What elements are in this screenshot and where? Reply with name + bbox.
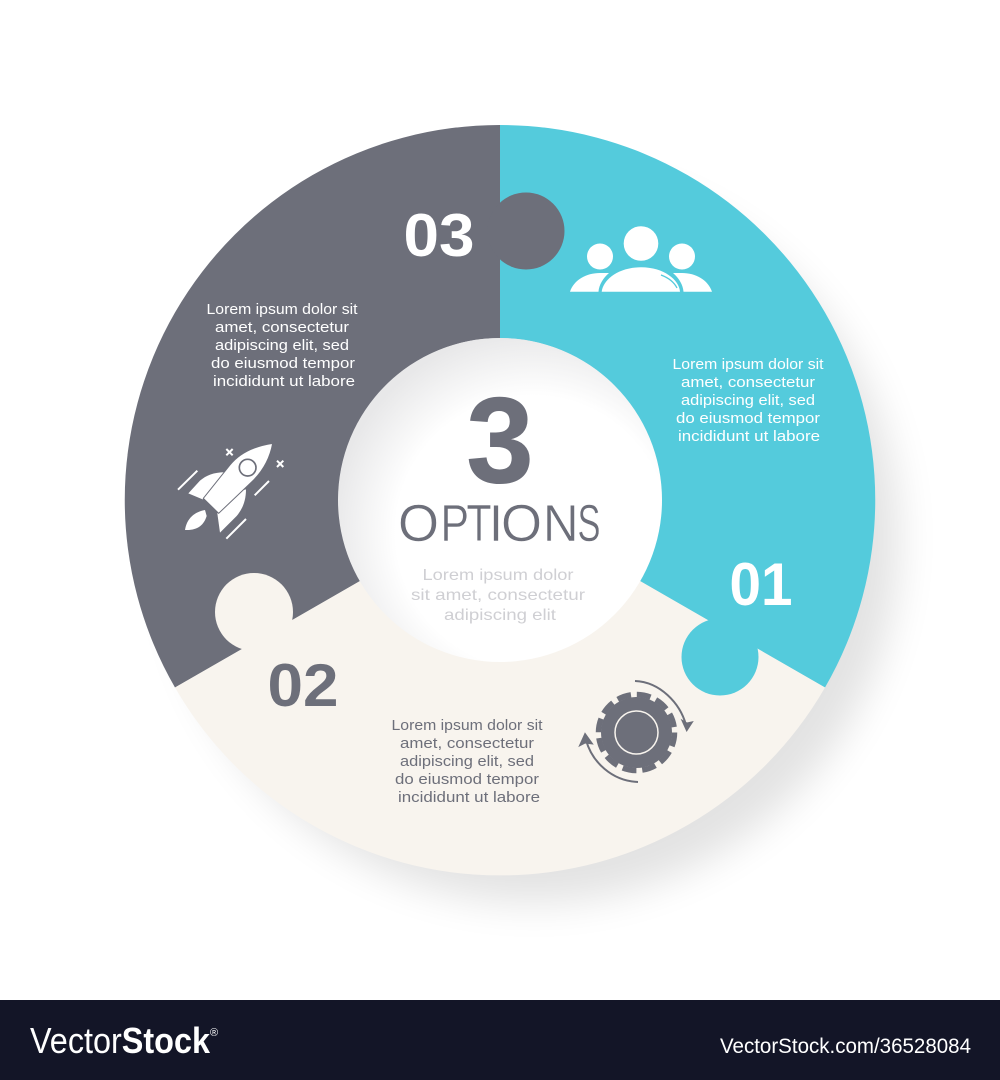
center heading OPTIONS: O [398, 495, 439, 553]
text block 02 [392, 717, 543, 806]
text block 03: incididunt ut labore [213, 373, 355, 390]
text block 01: Lorem ipsum dolor sit [672, 356, 824, 373]
center caption [411, 567, 586, 624]
footer trademark: ® [210, 1027, 218, 1039]
icon: rocket [178, 443, 283, 539]
center heading OPTIONS: I [489, 495, 503, 553]
center caption: Lorem ipsum dolor [422, 567, 574, 584]
footer bar [0, 1000, 1000, 1080]
icon: gear with arrows [579, 681, 693, 782]
text block 01: amet, consectetur [681, 374, 815, 391]
segment 03: gray [125, 125, 500, 688]
center number 3: 3 [466, 372, 534, 508]
text block 02: Lorem ipsum dolor sit [392, 717, 543, 734]
center heading OPTIONS: T [466, 495, 492, 553]
icon: people [570, 226, 712, 292]
text block 02: adipiscing elit, sed [400, 753, 534, 770]
footer url: VectorStock.com/36528084 [720, 1035, 971, 1058]
center circle [338, 338, 662, 662]
drop shadow of ring [169, 173, 899, 903]
segment 01: cyan [500, 125, 875, 687]
text block 03: Lorem ipsum dolor sit [206, 301, 358, 318]
footer logo: VectorStock [30, 1020, 211, 1061]
number 03: 03 [404, 202, 474, 269]
number 01: 01 [730, 551, 792, 618]
text block 03: do eiusmod tempor [211, 355, 355, 372]
center heading OPTIONS: P [440, 495, 469, 553]
text block 03: amet, consectetur [215, 319, 349, 336]
center caption: sit amet, consectetur [411, 587, 586, 604]
text block 01 [672, 356, 824, 445]
text block 03 [206, 301, 358, 390]
center caption: adipiscing elit [444, 607, 557, 624]
text block 02: incididunt ut labore [398, 789, 540, 806]
text block 01: adipiscing elit, sed [681, 392, 815, 409]
tab: cyan puzzle knob [682, 618, 758, 696]
number 02: 02 [268, 652, 338, 719]
segment 02: beige [175, 573, 825, 875]
tab: gray puzzle knob [488, 192, 564, 270]
center heading OPTIONS [398, 495, 600, 553]
center heading OPTIONS: N [543, 495, 578, 553]
text block 02: do eiusmod tempor [395, 771, 539, 788]
text block 02: amet, consectetur [400, 735, 534, 752]
text block 01: incididunt ut labore [678, 428, 820, 445]
tab: beige puzzle knob [215, 573, 293, 651]
text block 03: adipiscing elit, sed [215, 337, 349, 354]
center heading OPTIONS: S [578, 495, 600, 553]
center heading OPTIONS: O [501, 495, 542, 553]
text block 01: do eiusmod tempor [676, 410, 820, 427]
